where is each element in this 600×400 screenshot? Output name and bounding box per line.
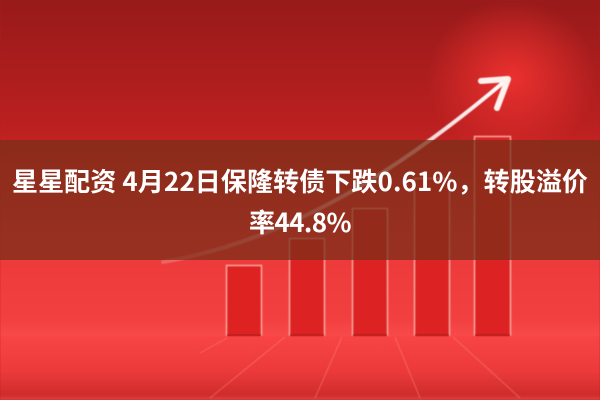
bar 3 — [352, 208, 388, 336]
title: 星星配资 4月22日保隆转债下跌0.61%，转股溢价 — [12, 162, 588, 199]
title — [12, 162, 588, 240]
bar 1 — [226, 265, 262, 336]
title: 率44.8% — [249, 203, 351, 240]
title band — [0, 140, 600, 260]
floor — [0, 336, 600, 400]
arrow — [163, 79, 508, 262]
bar 4 — [414, 178, 450, 336]
bar 5 — [474, 136, 511, 336]
glow behind arrow — [427, 0, 597, 156]
bar 2 — [289, 238, 325, 336]
bar chart — [226, 136, 511, 336]
